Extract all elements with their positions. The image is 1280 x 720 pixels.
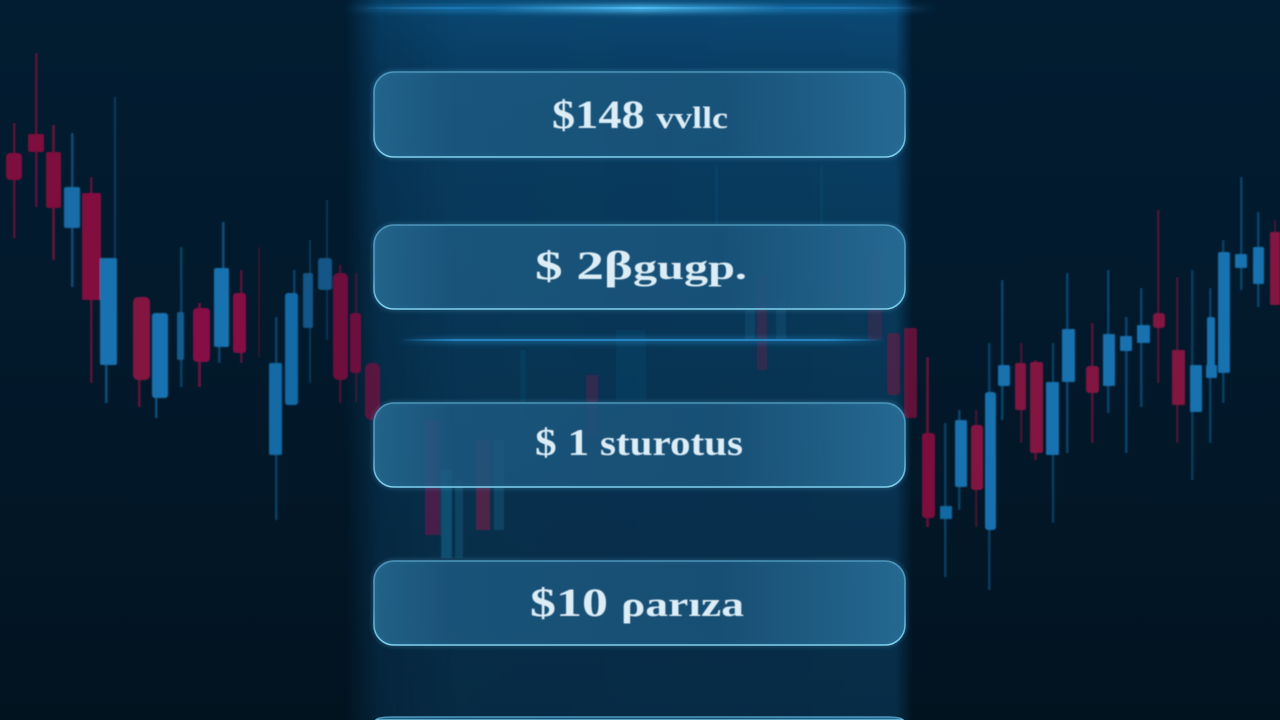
central glowing column: [345, 0, 913, 720]
faint candles behind the panels: [425, 165, 882, 558]
panel 3 value: $ 1 sturotus: [535, 422, 743, 464]
panel 1: [374, 72, 905, 157]
panel 5, cut off at bottom edge: [376, 717, 903, 720]
top glow line: [340, 5, 940, 12]
panel 1 value: $148 vvllc: [552, 92, 728, 137]
panel 2: [374, 225, 905, 309]
middle glow line: [395, 338, 890, 343]
panel 3: [374, 403, 905, 487]
panel 4: [374, 561, 905, 645]
left candlestick chart: [6, 53, 380, 520]
panel 2 value: $ 2β gugp.: [535, 243, 747, 288]
right candlestick chart: [887, 177, 1280, 590]
panel 4 value: $10 ρarıza: [530, 580, 744, 625]
